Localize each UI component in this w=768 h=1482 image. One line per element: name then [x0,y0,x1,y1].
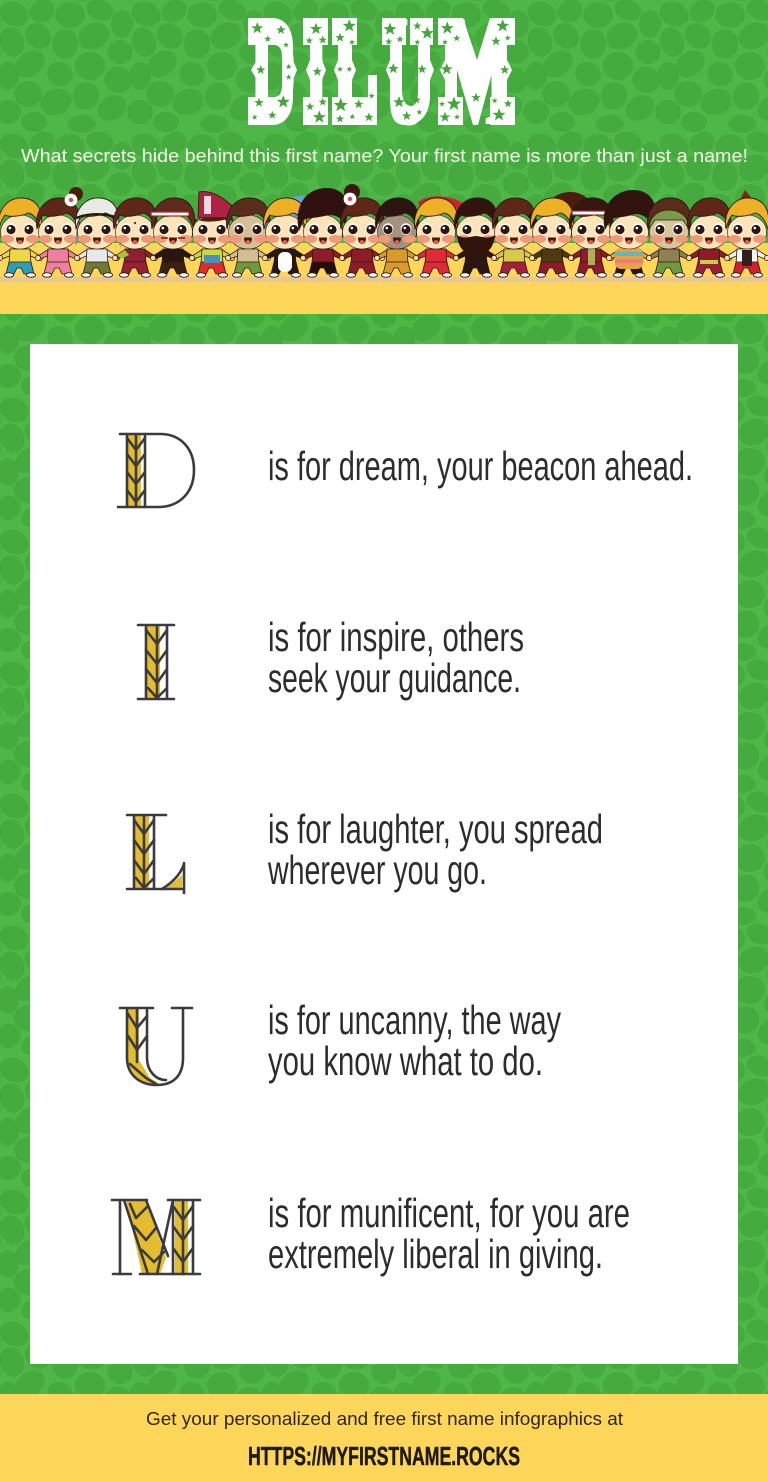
panel: footer [0,1394,768,1482]
text: U lines [268,997,561,1084]
character: bearded man in black [453,198,499,277]
icon: letter D [118,434,194,507]
character: blond woman in red dress [413,196,464,277]
character: tribal man with headband [568,198,614,277]
text: M lines: is for munificent, for you are [268,1190,630,1236]
character: man in maroon robe [686,198,732,277]
character: woman in green and red [112,198,158,277]
icon: letter L [127,815,184,893]
text: I lines: is for inspire, others [268,614,524,660]
character: woman in polka dot skirt [491,198,538,277]
icon: letter I [138,625,174,699]
footer text: Get your personalized and free first name infographics at [146,1409,623,1429]
character: blond woman in white and red [724,190,768,277]
character parade [0,184,768,277]
character: child in striped shirt [604,190,656,277]
letter row: I [138,614,524,701]
icon: letter U [120,1008,192,1085]
title letter bodies [248,18,515,125]
character: islander in grass skirt [225,198,271,277]
footer URL: HTTPS://MYFIRSTNAME.ROCKS [248,1441,520,1471]
letter row: L [127,806,603,893]
text: I lines: seek your guidance. [268,655,521,701]
text: M lines [268,1190,630,1277]
text: L lines: wherever you go. [267,847,487,893]
text: L lines [267,806,603,893]
character: woman with red hat [189,192,235,277]
character: tribal man in black [150,198,196,277]
character: dark-skinned man in orange [374,198,420,277]
character: blond boy in overalls [0,198,43,277]
title stars [251,19,512,123]
character: blond boy in olive [529,192,590,277]
panel: white content card [30,344,738,1364]
icon: letter M [112,1200,200,1274]
text: U lines: is for uncanny, the way [268,997,561,1043]
letter row: D [118,434,693,507]
yellow banner band [0,243,768,314]
letter row: M [112,1190,630,1277]
text: I lines [268,614,524,701]
text: L lines: is for laughter, you spread [268,806,603,852]
character: girl in pink kimono [35,187,83,277]
text: M lines: extremely liberal in giving. [268,1231,603,1277]
character: girl in maroon with flower [339,184,385,277]
ground stripe [0,277,768,282]
character: man in white keffiyeh [74,198,121,277]
character: islander with green hood [646,198,692,277]
subtitle: What secrets hide behind this first name? Your first name is more than just a name! [21,145,748,166]
text: U lines: you know what to do. [268,1038,543,1084]
character: blond boy with blue cap [262,196,315,277]
letter row: U [120,997,561,1085]
character: man in fur hat [298,188,348,277]
